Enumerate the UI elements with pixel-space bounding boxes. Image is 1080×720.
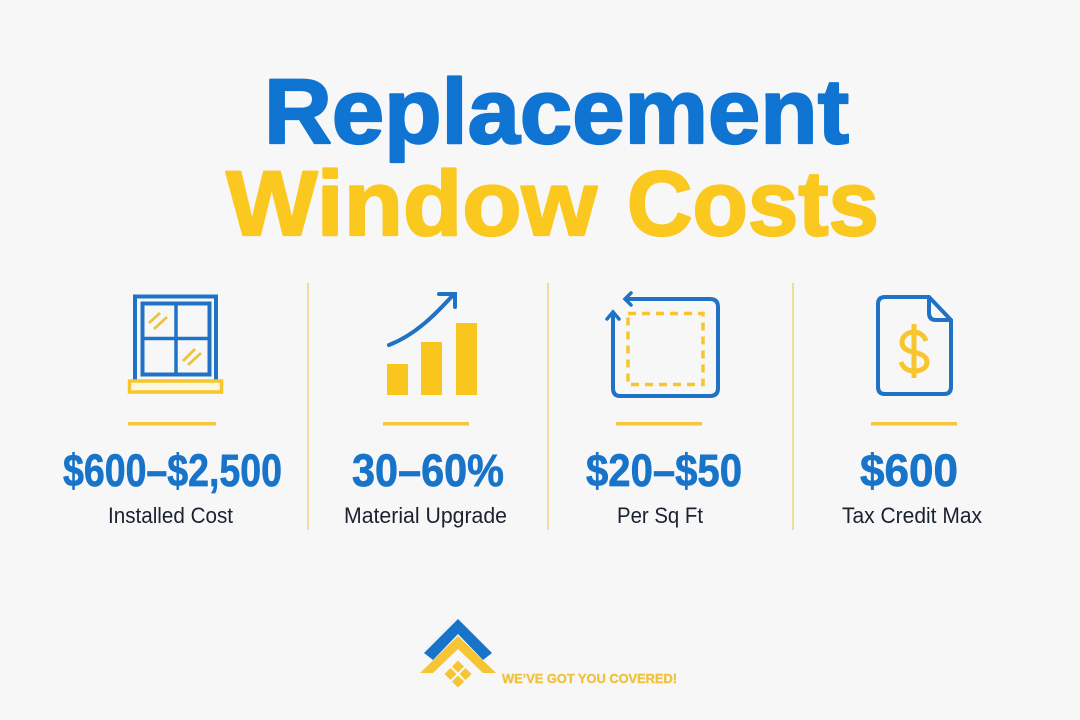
title: [226, 61, 879, 255]
panel: tax credit: [842, 297, 982, 528]
icon: area square with arrows: [607, 293, 718, 396]
accent rule: [128, 422, 216, 426]
title: Costs: [627, 153, 879, 255]
icon: document with dollar sign: [878, 297, 951, 394]
accent rule: [616, 422, 702, 426]
accent rule: [383, 422, 469, 426]
label: Installed Cost: [108, 503, 233, 528]
accent rule: [871, 422, 957, 426]
panel: installed cost: [63, 296, 282, 528]
icon: bar chart with arrow: [387, 294, 477, 395]
stat: $600–$2,500: [63, 445, 282, 496]
label: Material Upgrade: [344, 503, 507, 528]
logo: [420, 619, 677, 688]
panel: per square foot: [586, 293, 742, 528]
icon: roof: [420, 619, 496, 688]
title: Replacement: [264, 61, 849, 163]
column dividers: [308, 283, 793, 530]
label: Per Sq Ft: [617, 503, 703, 528]
stat: $20–$50: [586, 445, 742, 496]
stat: $600: [860, 445, 958, 496]
panel: material upgrade: [344, 294, 507, 528]
label: Tax Credit Max: [842, 503, 982, 528]
icon: window: [130, 296, 222, 392]
tagline: WE’VE GOT YOU COVERED!: [502, 671, 677, 686]
stat: 30–60%: [352, 445, 504, 496]
title: Window: [226, 153, 597, 255]
